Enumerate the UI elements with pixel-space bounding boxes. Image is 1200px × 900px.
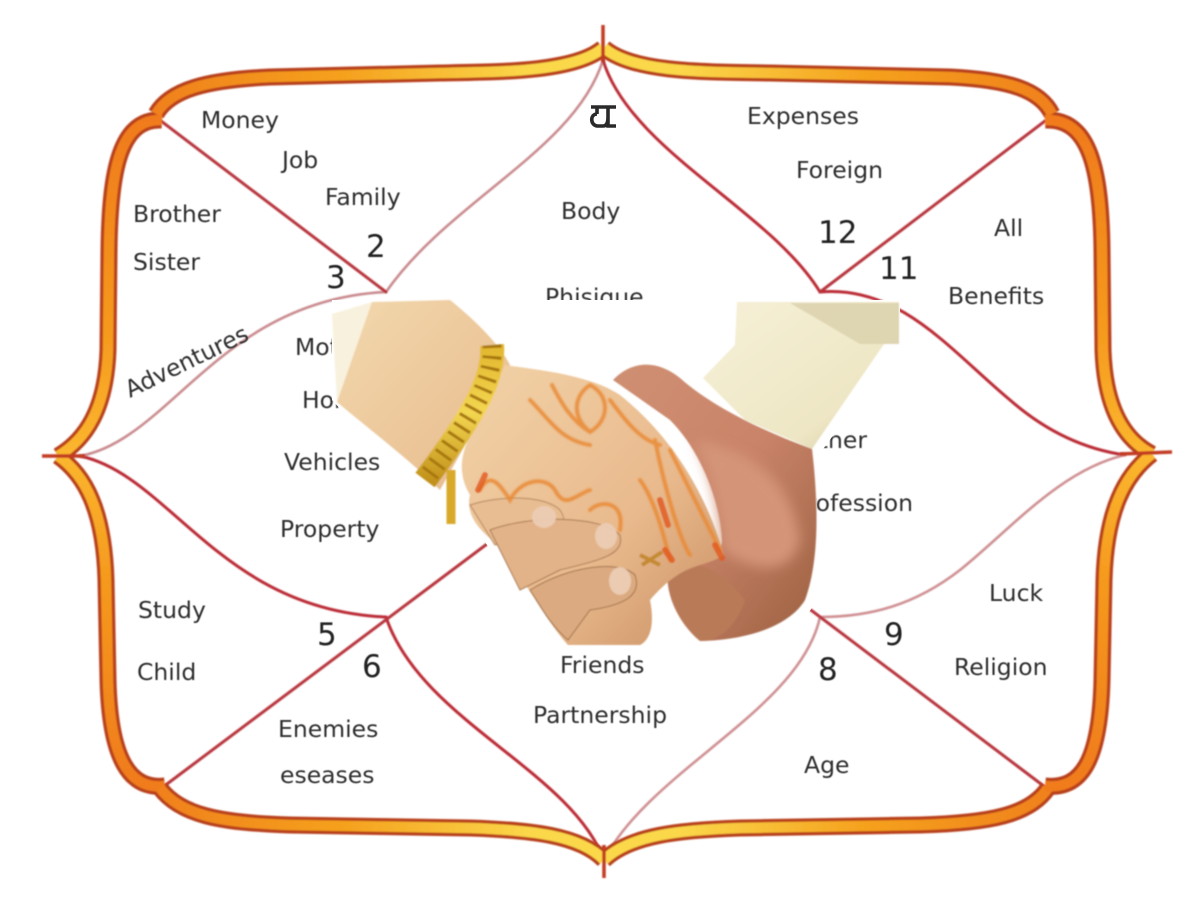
line: right lotus bottom [820,455,1125,617]
house 3 text: Sister [133,248,200,276]
house 5 text: Child [137,658,196,686]
house numbers: 9 [884,617,904,653]
house 4 text: Property [280,515,380,543]
diagonal: bottom right [795,598,1045,787]
house numbers: 2 [366,229,386,265]
man's sleeve [703,302,899,449]
line: left lotus bottom [80,456,386,617]
house 6 text [278,715,378,789]
house 11 text: Benefits [948,282,1044,310]
house numbers [317,215,918,688]
house 2 text: Money [201,106,279,134]
house 9 text [954,579,1048,681]
finger: middle [490,519,621,590]
house 1 text: Phisique [545,283,644,311]
henna pattern [480,385,720,560]
woman's cuff [332,302,372,402]
house numbers: 12 [818,215,857,251]
fingernails [532,506,631,595]
sleeve fold [790,303,899,344]
house 9 text: Religion [954,653,1048,681]
house numbers: 8 [818,652,838,688]
diagonal: top left [161,121,386,292]
house 6 text: Enemies [278,715,378,743]
inner diamond and diagonal chart lines [80,60,1125,860]
house 5 text: Study [138,596,206,624]
man's hand [613,365,816,641]
house 4 text [280,333,380,543]
line: top lotus right [603,60,820,292]
house 11 text [948,214,1044,310]
house 12 text: Foreign [796,156,883,184]
house 12 text [747,102,883,184]
finger: ring [530,567,637,640]
henna red accents [478,475,722,560]
house 4 text: Vehicles [284,448,380,476]
house 6 text: eseases [280,761,375,789]
house 2 text: Job [280,146,318,174]
house numbers: 3 [326,260,346,296]
house 2 text: Family [325,183,401,211]
line: right lotus top [820,291,1125,455]
house 3 text: Adventures [120,320,253,403]
house numbers: 5 [317,617,337,653]
house 3 text: Brother [133,200,221,228]
lagna symbol for house 1 [591,107,616,126]
house 3 text [120,200,253,403]
house 8 text: Age [804,751,849,779]
house 11 text: All [994,214,1023,242]
line: left lotus top [80,292,386,456]
gold bracelet [425,345,492,480]
joined hands photograph [332,300,899,645]
house 9 text: Luck [989,579,1043,607]
woman's forearm [337,300,510,490]
house 7 text [533,651,667,729]
house 10 text: Profession [793,489,913,517]
man's thumb [667,564,745,641]
man's palm shading [695,440,800,568]
bracelet clasp chain [446,470,456,524]
house 7 text: Partnership [533,701,667,729]
woman's hand [462,365,724,645]
house 12 text: Expenses [747,102,859,130]
house 7 text: Friends [560,651,645,679]
white cut-out behind hands [332,300,900,650]
line: bottom lotus left [386,617,604,860]
gold ring [640,552,662,565]
house 1 text [545,197,644,311]
house 2 text [201,106,401,211]
house numbers: 6 [362,649,382,685]
line: bottom lotus right [604,617,820,860]
finger: index [470,498,564,545]
house 4 text: Home [302,386,371,414]
diagonal: bottom left [163,538,495,787]
house 4 text: Mother [295,333,378,361]
house 10 text: Father [793,426,867,454]
house labels [120,102,1048,789]
house 5 text [137,596,206,686]
house numbers: 11 [879,251,918,287]
house 10 text [793,426,913,517]
diagonal: top right [820,121,1045,292]
house 1 text: Body [561,197,620,225]
line: top lotus left [386,60,603,292]
